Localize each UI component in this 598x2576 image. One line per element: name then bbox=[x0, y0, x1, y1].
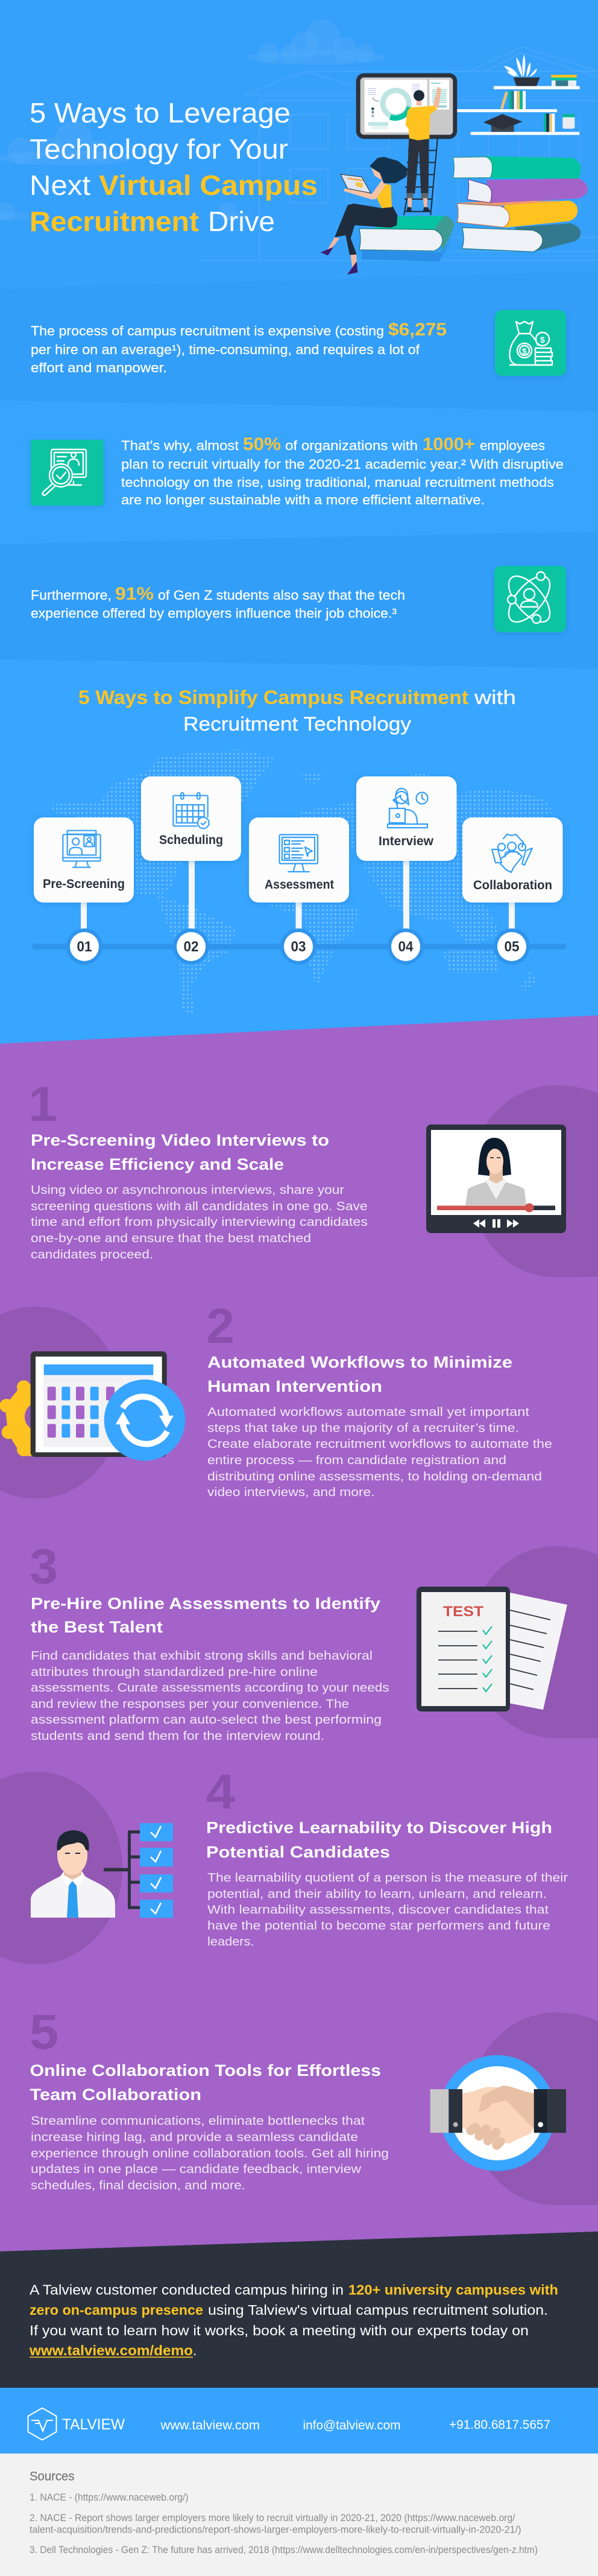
card: pre-screening bbox=[34, 817, 134, 903]
logo bbox=[28, 2408, 125, 2440]
label: Collaboration: Collaboration bbox=[473, 878, 552, 892]
sources panel bbox=[0, 2454, 598, 2576]
second paragraph: plan to recruit virtually for the 2020-21 academic year.² With disruptive bbox=[121, 457, 564, 472]
second paragraph bbox=[121, 434, 564, 507]
icon: candidate search bbox=[31, 440, 104, 506]
hero background clouds bbox=[0, 20, 386, 220]
body text: time and effort from physically interviewing candidates bbox=[31, 1216, 368, 1229]
body text: Streamline communications, eliminate bottlenecks that bbox=[31, 2114, 365, 2128]
body text: assessment platform can auto-select the best performing bbox=[31, 1713, 382, 1727]
heading: Potential Candidates bbox=[206, 1843, 390, 1861]
step 4 bbox=[0, 1765, 568, 1964]
phone: +91.80.6817.5657 bbox=[449, 2418, 550, 2432]
marker 01: 01 bbox=[77, 939, 92, 955]
section heading bbox=[78, 687, 516, 735]
icon: automated workflow calendar bbox=[0, 1351, 185, 1461]
background band: first paragraph bbox=[0, 271, 598, 411]
body text: video interviews, and more. bbox=[207, 1486, 375, 1499]
label: Interview: Interview bbox=[379, 834, 434, 848]
step 5 bbox=[30, 2005, 598, 2205]
title: Virtual Campus bbox=[99, 170, 318, 201]
call to action text: using Talview's virtual campus recruitment solution. bbox=[208, 2302, 548, 2318]
background band: third paragraph bbox=[0, 531, 598, 668]
body text: have the potential to become star performers and future bbox=[207, 1920, 550, 1933]
heading: Automated Workflows to Minimize bbox=[207, 1353, 512, 1371]
title: 5 Ways to Leverage bbox=[30, 97, 291, 128]
call to action text bbox=[29, 2282, 558, 2358]
marker 02 bbox=[173, 928, 209, 965]
step 2 bbox=[0, 1299, 552, 1499]
source list: 2. NACE - Report shows larger employers more likely to recruit virtually in 2020-21, 2020 (https://www.naceweb.org/ bbox=[30, 2512, 515, 2524]
body text bbox=[207, 1871, 568, 1949]
icon: video player bbox=[426, 1125, 566, 1233]
stat: 50%: 50% bbox=[243, 434, 281, 454]
sources heading: Sources bbox=[30, 2470, 75, 2483]
body text: leaders. bbox=[207, 1935, 254, 1949]
marker 04 bbox=[388, 928, 424, 965]
heading: Increase Efficiency and Scale bbox=[31, 1155, 284, 1173]
icon: handshake bbox=[430, 2055, 566, 2171]
body text: Automated workflows automate small yet important bbox=[207, 1406, 530, 1419]
icon: interviewer with clock bbox=[388, 788, 428, 828]
body text: schedules, final decision, and more. bbox=[31, 2179, 245, 2192]
marker 01 bbox=[66, 928, 102, 965]
title: Recruitment bbox=[30, 206, 199, 237]
marker 04: 04 bbox=[398, 939, 414, 955]
call to action text: www.talview.com/demo bbox=[29, 2343, 193, 2358]
heading: the Best Talent bbox=[31, 1618, 163, 1636]
second paragraph: of organizations with bbox=[285, 438, 418, 453]
icon: candidate with checklist bbox=[31, 1823, 173, 1918]
call to action text: . bbox=[193, 2343, 197, 2358]
section heading: Recruitment Technology bbox=[183, 713, 411, 735]
heading: Pre-Screening Video Interviews to bbox=[31, 1131, 329, 1149]
body text bbox=[31, 1649, 389, 1743]
label: Scheduling: Scheduling bbox=[159, 833, 223, 847]
logo: TALVIEW bbox=[62, 2416, 125, 2433]
body text: Create elaborate recruitment workflows to automate the bbox=[207, 1438, 552, 1451]
body text: experience through online collaboration tools. Get all hiring bbox=[31, 2147, 389, 2160]
heading bbox=[30, 2061, 381, 2104]
hero illustration bbox=[321, 54, 588, 274]
marker 05: 05 bbox=[504, 939, 520, 955]
body text: potential, and their ability to learn, unlearn, and relearn. bbox=[207, 1888, 547, 1901]
card: interview bbox=[356, 776, 457, 861]
icon: online test: TEST bbox=[443, 1604, 483, 1620]
number 4: 4 bbox=[206, 1765, 235, 1819]
body text: updates in one place — candidate feedback, interview bbox=[31, 2163, 362, 2176]
third paragraph: of Gen Z students also say that the tech bbox=[158, 588, 405, 603]
body text: The learnability quotient of a person is the measure of their bbox=[207, 1871, 568, 1885]
heading bbox=[31, 1131, 329, 1173]
second paragraph: are no longer sustainable with a more efficient alternative. bbox=[121, 492, 485, 507]
blob bbox=[469, 1085, 598, 1277]
icon: stack of books bbox=[453, 156, 588, 252]
body text: entire process — from candidate registration and bbox=[207, 1454, 506, 1467]
footer bar bbox=[0, 2388, 598, 2454]
marker 03 bbox=[280, 928, 316, 965]
call to action text: 120+ university campuses with bbox=[348, 2282, 558, 2297]
body text: Using video or asynchronous interviews, share your bbox=[31, 1184, 344, 1197]
body text: and review the responses per your convenience. The bbox=[31, 1698, 349, 1711]
body text bbox=[207, 1406, 552, 1499]
heading bbox=[206, 1818, 552, 1861]
icon: assessment screen bbox=[280, 835, 318, 872]
number 1: 1 bbox=[28, 1077, 57, 1132]
timeline bbox=[32, 857, 567, 965]
step 3 bbox=[30, 1540, 598, 1743]
heading: Pre-Hire Online Assessments to Identify bbox=[31, 1594, 380, 1613]
call to action text: If you want to learn how it works, book a meeting with our experts today on bbox=[30, 2323, 529, 2338]
source list: talent-acquisition/trends-and-predictions/report-shows-larger-employers-more-likely-to-recruit-virtually-in-2020-21/) bbox=[30, 2524, 521, 2535]
marker 02: 02 bbox=[183, 939, 199, 955]
card: assessment bbox=[249, 817, 349, 903]
body text: attributes through standardized pre-hire online bbox=[31, 1666, 318, 1679]
label: Assessment: Assessment bbox=[265, 878, 334, 892]
section heading: 5 Ways to Simplify Campus Recruitment bbox=[78, 687, 468, 708]
title: Technology for Your bbox=[30, 133, 288, 165]
heading bbox=[31, 1594, 380, 1636]
email: info@talview.com bbox=[303, 2419, 400, 2432]
purple section background bbox=[0, 1015, 598, 2256]
third paragraph: Furthermore, bbox=[31, 588, 112, 603]
body text: steps that take up the majority of a recruiter’s time. bbox=[207, 1421, 519, 1435]
body text bbox=[31, 2114, 389, 2192]
number 2: 2 bbox=[206, 1299, 234, 1354]
section heading: with bbox=[474, 687, 516, 708]
body text: distributing online assessments, to holding on-demand bbox=[207, 1470, 542, 1483]
step 1 bbox=[28, 1077, 598, 1277]
blue hero background bbox=[0, 0, 598, 1050]
icon: money bag: $ bbox=[540, 335, 545, 344]
hero background house outline bbox=[198, 46, 598, 261]
title: Drive bbox=[208, 206, 275, 237]
icon: video interview bbox=[63, 831, 101, 868]
marker 05 bbox=[494, 928, 530, 965]
icon: online test bbox=[417, 1587, 567, 1712]
body text bbox=[31, 1184, 368, 1261]
blob bbox=[0, 1772, 122, 1964]
source list: 3. Dell Technologies - Gen Z: The future has arrived, 2018 (https://www.delltechnologies.com/en-in/perspectives/gen-z.htm) bbox=[30, 2544, 538, 2555]
icon: calendar bbox=[173, 793, 209, 828]
body text: Find candidates that exhibit strong skills and behavioral bbox=[31, 1649, 373, 1663]
stems bbox=[81, 857, 515, 935]
number 3: 3 bbox=[30, 1540, 58, 1594]
source list bbox=[30, 2492, 538, 2555]
website: www.talview.com bbox=[160, 2419, 260, 2432]
background band: five ways section bbox=[0, 659, 598, 1050]
body text: increase hiring lag, and provide a seamless candidate bbox=[31, 2131, 358, 2144]
title bbox=[30, 97, 318, 237]
label: Pre-Screening: Pre-Screening bbox=[43, 877, 125, 891]
third paragraph: experience offered by employers influence their job choice.³ bbox=[31, 606, 397, 621]
icon: man on ladder bbox=[404, 86, 441, 215]
third paragraph bbox=[31, 584, 405, 621]
body text: candidates proceed. bbox=[31, 1248, 153, 1261]
icon: shelves bbox=[457, 54, 580, 135]
stat: cost per hire: $6,275 bbox=[388, 320, 447, 340]
body text: screening questions with all candidates in one go. Save bbox=[31, 1200, 368, 1213]
second paragraph: technology on the rise, using traditional, manual recruitment methods bbox=[121, 475, 554, 490]
blob bbox=[469, 1546, 598, 1738]
call to action text: zero on-campus presence bbox=[30, 2302, 203, 2318]
second paragraph: That's why, almost bbox=[121, 438, 239, 453]
dotted world map bbox=[36, 742, 561, 1020]
icon: connected candidate bbox=[494, 566, 566, 632]
title: Next bbox=[30, 170, 90, 201]
marker 03: 03 bbox=[291, 939, 306, 955]
stat: 1000+: 1000+ bbox=[423, 434, 475, 454]
second paragraph: employees bbox=[480, 438, 545, 453]
heading: Predictive Learnability to Discover High bbox=[206, 1818, 552, 1836]
heading: Online Collaboration Tools for Effortless bbox=[30, 2061, 381, 2080]
card: scheduling bbox=[141, 776, 241, 861]
call to action text: A Talview customer conducted campus hiring in bbox=[30, 2282, 344, 2297]
stat: 91%: 91% bbox=[115, 584, 154, 604]
first paragraph: The process of campus recruitment is expensive (costing bbox=[31, 323, 384, 338]
first paragraph: effort and manpower. bbox=[31, 360, 167, 375]
first paragraph: per hire on an average¹), time-consuming, and requires a lot of bbox=[31, 342, 420, 357]
icon: money bag: $ bbox=[522, 346, 527, 356]
icon: book with seated woman bbox=[321, 157, 454, 274]
blob bbox=[469, 2013, 598, 2205]
first paragraph bbox=[31, 320, 447, 375]
icon: money bag bbox=[495, 310, 566, 376]
background band: second paragraph bbox=[0, 401, 598, 544]
source list: 1. NACE - (https://www.naceweb.org/) bbox=[30, 2492, 188, 2503]
body text: With learnability assessments, discover candidates that bbox=[207, 1903, 549, 1917]
body text: assessments. Curate assessments according to your needs bbox=[31, 1681, 389, 1695]
body text: students and send them for the interview round. bbox=[31, 1730, 324, 1743]
number 5: 5 bbox=[30, 2005, 58, 2060]
card: collaboration bbox=[462, 817, 563, 903]
blob bbox=[0, 1307, 122, 1499]
icon: team handshake bbox=[492, 834, 532, 872]
heading: Team Collaboration bbox=[30, 2086, 201, 2104]
heading: Human Intervention bbox=[207, 1377, 382, 1395]
call to action panel bbox=[0, 2232, 598, 2388]
heading bbox=[207, 1353, 512, 1395]
body text: one-by-one and ensure that the best matched bbox=[31, 1232, 311, 1245]
icon: monitor bbox=[356, 73, 457, 139]
